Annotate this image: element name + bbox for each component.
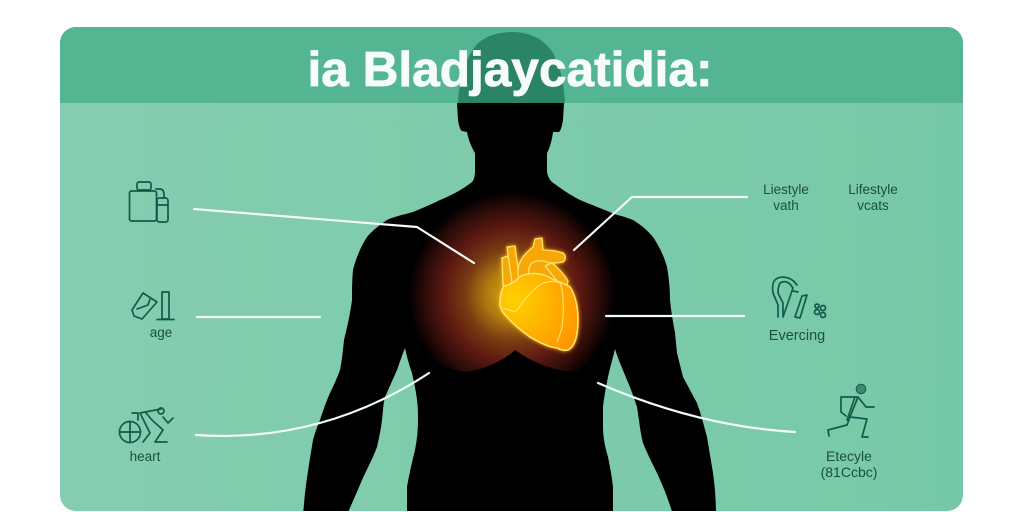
icon: hook and sprig xyxy=(773,277,826,318)
aortic arch xyxy=(518,238,565,286)
label: vcats: vcats xyxy=(857,198,889,213)
icon: glowing heart xyxy=(500,238,578,350)
icon: running figure xyxy=(828,384,874,437)
leader line: bottom right xyxy=(598,383,795,432)
second vessel xyxy=(507,246,519,283)
icon: age tag and column xyxy=(132,292,174,320)
heart body xyxy=(500,274,578,350)
leader line: middle right xyxy=(606,315,744,317)
label: vath: vath xyxy=(773,198,799,213)
leader line: top left xyxy=(194,209,474,263)
leader line: bottom left xyxy=(196,373,429,436)
torso and arms xyxy=(303,103,716,512)
label: age: age xyxy=(150,325,172,340)
title: ia Bladjaycatidia: xyxy=(308,43,712,97)
right lobe xyxy=(545,263,568,285)
leader line: top right xyxy=(574,197,747,250)
head dome in title band xyxy=(458,32,565,103)
label: (81Ccbc): (81Ccbc) xyxy=(821,464,877,480)
chest glow xyxy=(412,195,612,372)
runner head xyxy=(856,384,866,394)
label: Evercing: Evercing xyxy=(769,328,825,344)
vessel backing xyxy=(518,248,568,290)
label: lifestyle group one: Liestyle xyxy=(763,182,809,197)
icon: person with wheel xyxy=(120,408,173,442)
first vessel xyxy=(502,256,513,289)
label: heart: heart xyxy=(130,449,161,464)
title band xyxy=(60,27,963,103)
runner body xyxy=(828,397,874,437)
icon: bag and bottle xyxy=(130,182,168,222)
body silhouette xyxy=(303,32,716,512)
heart inner lines xyxy=(503,282,563,342)
label: Etecyle: Etecyle xyxy=(826,448,872,464)
leader line: middle left xyxy=(197,316,320,318)
label: lifestyle group two: Lifestyle xyxy=(848,182,898,197)
